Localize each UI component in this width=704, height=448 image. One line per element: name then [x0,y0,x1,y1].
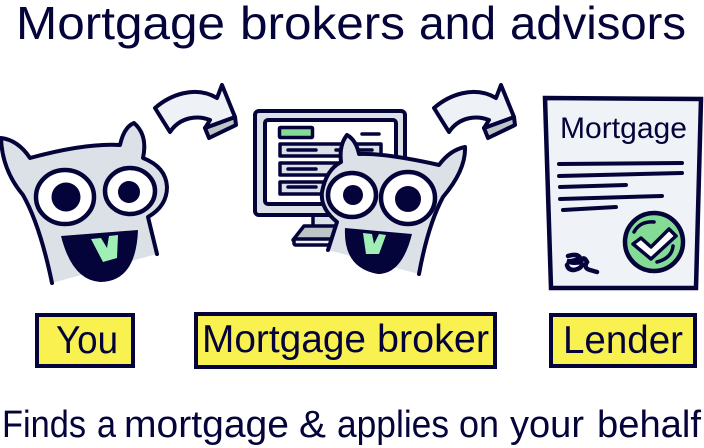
icon: computer monitor [255,111,405,245]
icon: mortgage document: Mortgage [560,112,687,145]
label: Lender: Lender [563,319,683,362]
label: Mortgage broker: broker [377,318,489,361]
arrow: you to broker [155,85,236,138]
caption: a [97,404,117,446]
icon: monster "You" [1,123,167,283]
caption: your [510,404,584,446]
caption [2,404,701,446]
icon: monster "Mortgage broker" [322,135,465,274]
label: Mortgage broker: Mortgage [202,318,366,361]
caption: behalf [597,404,701,446]
icon: mortgage document [545,98,701,288]
caption: applies [337,404,449,446]
label: Mortgage broker [196,314,495,367]
title [16,0,686,49]
caption: Finds [2,404,86,446]
caption: mortgage [124,404,289,446]
arrow: broker to lender [434,85,515,138]
label: You [37,315,133,366]
label: You: You [56,319,118,362]
caption: on [459,404,499,446]
caption: & [299,404,326,446]
